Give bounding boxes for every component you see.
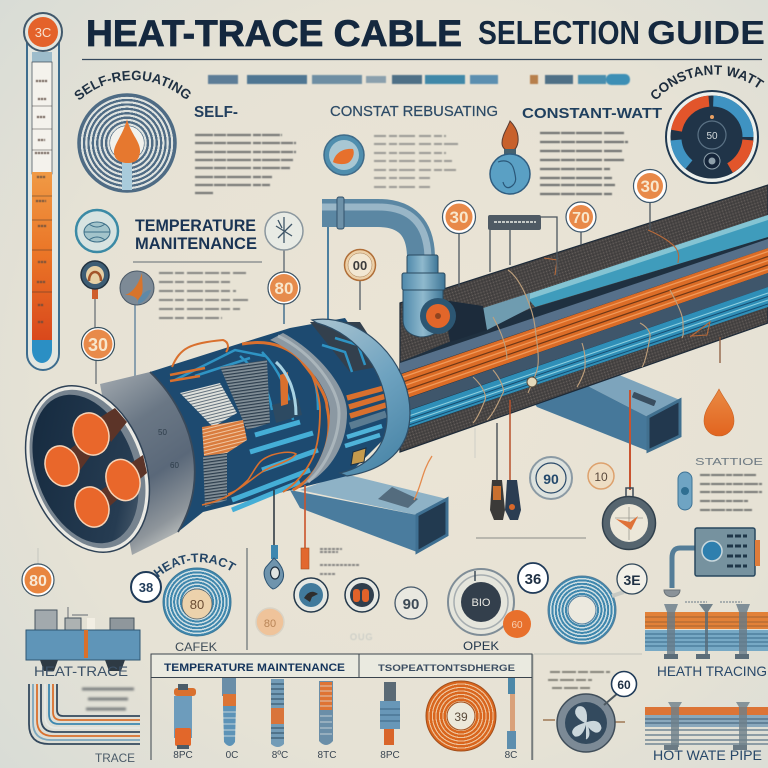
interior wires inside ring xyxy=(310,322,388,372)
icon: fan housing xyxy=(543,694,625,752)
control box with drain pipe xyxy=(664,528,760,597)
text block: temperature maintenance xyxy=(159,273,248,318)
probe 6 xyxy=(507,678,516,749)
panel: temperature maintenance table xyxy=(151,654,532,761)
icon: sensor with orange stem xyxy=(81,261,109,330)
slate band upper xyxy=(400,239,768,374)
title: HEAT-TRACE CABLE xyxy=(86,13,462,54)
table header xyxy=(151,654,532,760)
main cable xyxy=(400,185,768,452)
icon: blue coil large xyxy=(548,576,616,644)
faded caption xyxy=(695,370,758,374)
icon: orange coil xyxy=(426,681,496,751)
panel: temperature maintenance xyxy=(76,210,376,384)
heading: constant-watt: CONSTANT-WATT xyxy=(522,105,662,122)
badge: 36: 36 xyxy=(525,571,541,588)
badge: 30 upper: 30 xyxy=(641,177,659,196)
thermometer xyxy=(24,13,62,370)
blue insulation band xyxy=(525,215,768,307)
probe 1 xyxy=(174,684,196,749)
badge: 30: 30 xyxy=(88,335,108,355)
text block: fan xyxy=(548,672,610,688)
table value labels right xyxy=(380,750,517,761)
badge: 38 xyxy=(131,572,161,602)
arc heading: constant watt: CONSTANT WATT xyxy=(651,65,764,99)
label: trace xyxy=(33,753,135,765)
blurred footnote xyxy=(500,545,545,547)
connector strip with leads xyxy=(488,215,557,276)
title: SELECTION xyxy=(478,14,640,51)
text block: station xyxy=(700,475,762,510)
icon: sensor disc one xyxy=(294,578,328,612)
blurred sub-heading strip xyxy=(208,74,630,85)
label: opek: OPEK xyxy=(463,641,499,653)
heading: constant regulating: CONSTAT REBUSATING xyxy=(330,104,498,120)
thermometer: 3C xyxy=(35,25,51,40)
badge: 00 xyxy=(344,250,376,310)
icon: sensor disc two xyxy=(345,578,379,612)
label: heat-trace: HEAT-TRACE xyxy=(34,664,128,679)
text block: self-regulating xyxy=(195,135,296,193)
hanging probes under collar xyxy=(247,485,360,650)
icon: bulb with flame xyxy=(490,121,530,194)
table value labels right: 8PC xyxy=(380,750,400,761)
badge: 30 upper xyxy=(634,170,666,230)
cable end face with four conductors xyxy=(4,368,171,570)
probe 4 xyxy=(319,681,333,745)
icon: orange coil: 39 xyxy=(454,710,468,724)
icon: machine xyxy=(26,607,140,671)
light ribs xyxy=(180,383,237,427)
conductor 4 xyxy=(69,482,115,532)
arc heading: self-regulating: SELF-REGUATING xyxy=(74,70,191,100)
blurred wire notes xyxy=(82,689,134,709)
badge: 38: 38 xyxy=(139,580,153,595)
label: cafek: CAFEK xyxy=(175,640,217,654)
badge: 30 right xyxy=(442,200,476,287)
support bracket: rear xyxy=(530,372,680,451)
badge: 10 peach: 10 xyxy=(594,470,608,484)
badge: 30 right: 30 xyxy=(450,208,468,227)
icon: teal disc xyxy=(76,210,118,252)
probe 5 xyxy=(380,682,400,745)
blue conductors xyxy=(400,287,768,430)
badge: 90 round xyxy=(530,457,572,499)
badge: 00: 00 xyxy=(353,258,367,273)
conductor 2 xyxy=(39,441,85,491)
badge: 36 xyxy=(518,563,548,593)
elbow pipe with valve xyxy=(322,197,487,342)
badge: 80 left: 80 xyxy=(29,573,47,590)
table header: TEMPERATURE MAINTENANCE xyxy=(164,662,345,674)
badge: orange 60: 60 xyxy=(511,620,523,631)
braided jacket xyxy=(400,185,768,452)
probe 3 xyxy=(271,679,284,747)
slate band lower xyxy=(400,273,768,413)
grey cylinder housing xyxy=(100,372,195,555)
table value labels xyxy=(173,750,336,761)
cutaway base xyxy=(150,318,410,532)
support bracket: front xyxy=(290,456,447,552)
conductor 3 xyxy=(100,455,146,505)
dial gauge on red lead xyxy=(602,390,656,550)
text block: constant-watt xyxy=(540,133,628,194)
badge: 80 left xyxy=(22,548,54,596)
icon: grey flame disc xyxy=(120,271,154,376)
text line: heating note xyxy=(655,687,762,689)
table value labels: 0C xyxy=(226,750,238,761)
badge: peach disc xyxy=(256,608,284,636)
blue bars xyxy=(232,422,318,510)
faded label: OUG xyxy=(350,632,374,642)
icon: flame disc xyxy=(324,135,364,175)
icon: dial with BIO centre: BIO xyxy=(472,597,491,609)
text block: constant regulating xyxy=(374,136,458,187)
dark core xyxy=(400,237,768,431)
heading: station: STATTIOE xyxy=(695,456,763,468)
icon: gauge: 50 xyxy=(706,131,718,142)
heading: temperature maintenance: TEMPERATURE xyxy=(135,216,256,235)
probe 2 xyxy=(222,678,236,746)
lower ribs xyxy=(203,453,227,507)
orange arcs xyxy=(283,338,320,492)
icon: L-shaped wire bundle xyxy=(29,684,140,744)
panel: station xyxy=(678,456,763,510)
orange ribs xyxy=(202,420,247,456)
icon: heating bands xyxy=(645,602,768,659)
badge: orange 60 xyxy=(503,610,531,638)
heading: temperature maintenance: MANITENANCE xyxy=(135,234,257,253)
grey band xyxy=(270,333,347,485)
dark ribs xyxy=(220,360,270,430)
icon: gauge xyxy=(666,91,758,183)
cutaway section xyxy=(150,318,410,532)
title: GUIDE xyxy=(647,14,765,51)
conductor 1 xyxy=(67,408,115,460)
heading: self: SELF- xyxy=(194,104,238,121)
badge: 90 grey: 90 xyxy=(403,596,419,613)
orange conductors xyxy=(400,248,768,400)
lead: brown stub xyxy=(719,337,721,363)
badge: 80: 80 xyxy=(275,279,293,298)
table value labels: 8PC xyxy=(173,750,193,761)
title xyxy=(86,13,765,54)
panel: constant regulating xyxy=(324,104,530,194)
table value labels right: 8C xyxy=(505,750,517,761)
heading: heath tracing: HEATH TRACING xyxy=(657,663,767,679)
label: trace: TRACE xyxy=(95,753,135,765)
badge: 60 with lead: 60 xyxy=(617,678,631,692)
light-blue collar ring xyxy=(312,319,410,476)
icon: oil drop xyxy=(704,389,734,436)
tie wires xyxy=(473,270,683,423)
badge: peach disc: 80 xyxy=(264,618,276,630)
small inner plates xyxy=(272,398,302,423)
grey cylinder housing: 60 xyxy=(170,461,179,470)
panel: fan xyxy=(533,654,642,760)
icon: blue coil xyxy=(163,568,231,636)
badge: 90 round: 90 xyxy=(543,471,559,487)
nut xyxy=(527,377,537,387)
badge: 70 xyxy=(566,202,596,245)
table value labels: 8ºC xyxy=(272,750,288,761)
upper blue wires xyxy=(175,345,318,420)
grey cylinder housing: 50 xyxy=(158,428,167,437)
badge: 30 xyxy=(82,328,114,384)
icon: blue coil: 80 xyxy=(190,597,204,612)
badge: 3E with lead xyxy=(612,564,647,596)
icon: capsule sensor xyxy=(678,472,692,510)
hanging probes at centre xyxy=(475,400,586,538)
icon: hot water pipe bands xyxy=(645,702,768,750)
panel: constant-watt xyxy=(522,65,764,196)
badge: 10 peach xyxy=(588,463,614,489)
badge: 80 xyxy=(268,272,300,324)
table header: TSOPEATTONTSDHERGE xyxy=(378,663,515,674)
icon: sketch disc xyxy=(265,212,303,272)
icon: spiral cable with flame xyxy=(78,94,176,192)
icon: dial with BIO centre xyxy=(448,569,514,635)
arc heading: heat-trace: HEAT-TRACT xyxy=(153,553,236,578)
badge: 90 grey xyxy=(395,587,427,619)
heading: hot water pipe: HOT WATE PIPE xyxy=(653,747,762,763)
table value labels: 8TC xyxy=(318,750,336,761)
heading: temperature maintenance xyxy=(135,216,257,253)
badge: 3E with lead: 3E xyxy=(623,572,641,588)
panel: self-regulating xyxy=(74,70,297,195)
badge: 70: 70 xyxy=(572,210,590,227)
orange wiring loops xyxy=(172,340,228,367)
